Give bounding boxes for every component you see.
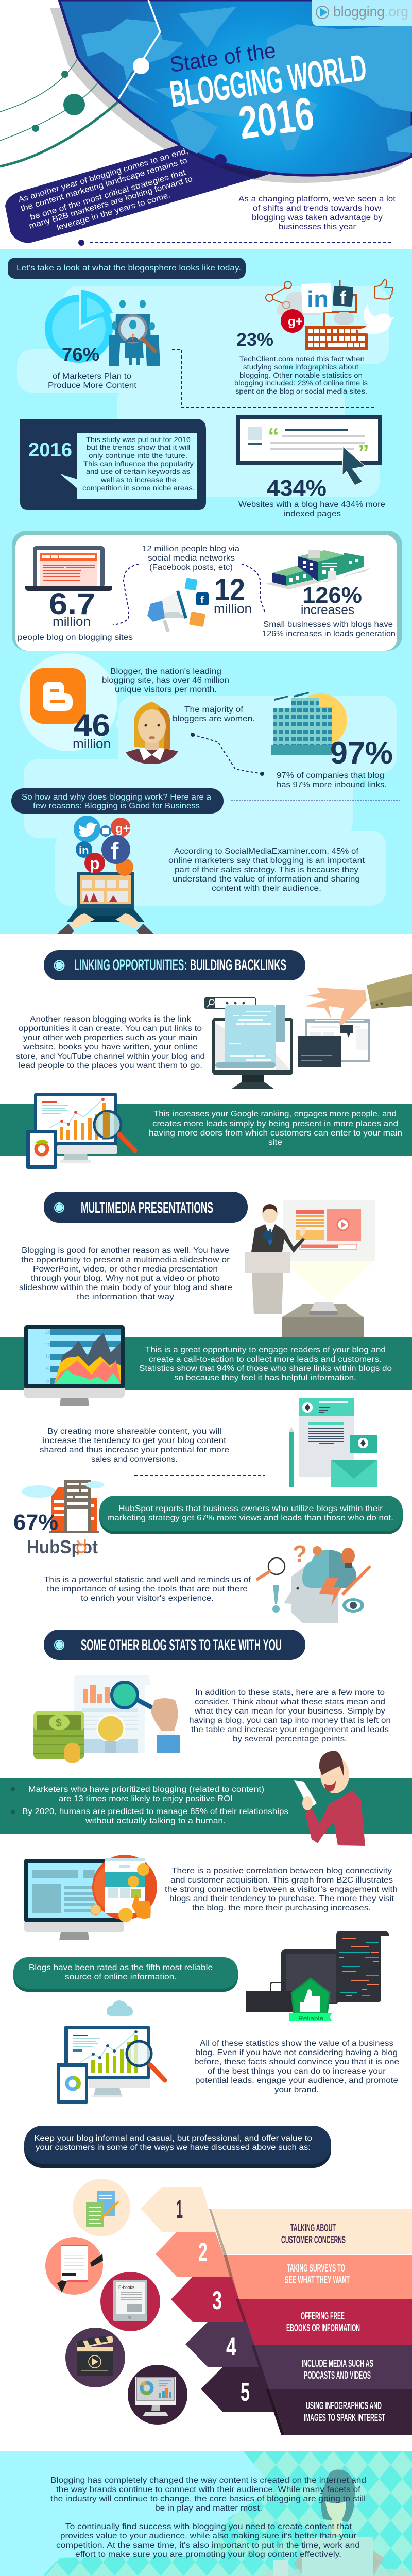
stat: 97%: 97% of companies that blog <box>277 771 384 780</box>
stat: 12 million: 12 <box>214 572 245 607</box>
callout: 2016 study: well as to increase the <box>100 476 176 484</box>
text: conclusion: To continually find success with blogging you need to create content that <box>65 2522 352 2531</box>
band: call to action: Statistics show that 94% of those who share links within blogs do <box>139 1364 392 1373</box>
callout: keep your blog informal: Keep your blog informal and casual, but professional, and offer value to <box>34 2134 312 2143</box>
icon: cloud analytics dashboard <box>57 2000 165 2104</box>
band: call to action: so because they feel it has helpful information. <box>174 1374 356 1382</box>
text: shareable content: increase the tendency to get your blog content <box>43 1436 227 1445</box>
stat: 12 million: (Facebook posts, etc) <box>149 563 233 572</box>
stat: 23%: studying some infographics about <box>243 363 358 371</box>
icon: head with ideas: ? <box>293 1540 307 1567</box>
text: multimedia: PowerPoint, video, or other media presentation <box>33 1265 218 1274</box>
intro text right: of shifts and trends towards how <box>253 204 382 213</box>
text: women bloggers: The majority of <box>184 705 244 714</box>
step 1: customer concerns: TALKING ABOUT <box>290 2223 336 2234</box>
callout: 2016 study <box>20 419 206 510</box>
stat: 434%: Websites with a blog have 434% more <box>238 500 385 509</box>
text: link opportunities: website, books you have written, your online <box>23 1043 198 1052</box>
stat: 12 million: social media networks <box>148 554 235 563</box>
callout: 2016 study: and use of certain keywords as <box>86 468 190 476</box>
icon: monitor, scroll, search bar and hand <box>204 974 412 1089</box>
callout: HubSpot report <box>99 1496 403 1534</box>
text: value of a business blog: before, these facts should convince you that it is one <box>194 2058 399 2066</box>
band: call to action <box>0 1325 412 1406</box>
intro ribbon: leverage in the years to come. <box>56 191 171 232</box>
heading: other blog stats <box>44 1630 305 1660</box>
heading: linking opportunities: LINKING OPPORTUNITIES: <box>74 957 187 974</box>
step 1: customer concerns: CUSTOMER CONCERNS <box>281 2234 346 2246</box>
stat: Blogger 46 million: Blogger, the nation's leading <box>110 667 221 676</box>
text: value of a business blog: potential leads, engage your audience, and promote <box>195 2076 398 2085</box>
text: social media examiner: part of their sales strategy. This is because they <box>175 866 358 874</box>
step 3: free ebooks: E-books <box>118 2285 134 2291</box>
stat: 434%: 434% <box>267 476 327 501</box>
text: shareable content <box>40 1427 229 1464</box>
icon: monitor with quote <box>236 415 382 485</box>
step 5: infographics <box>128 2365 412 2435</box>
heading: why blogging works <box>11 788 224 814</box>
icon: laptop <box>25 546 112 591</box>
text: women bloggers <box>173 705 255 723</box>
callout: 2016 study: This can influence the popularity <box>83 460 194 468</box>
stat: 6.7 million: million <box>53 615 91 629</box>
icon: 67% building: 67% <box>13 1510 58 1535</box>
icon: tablet with social bubbles and hands: g+ <box>115 822 130 836</box>
heading: why blogging works: So how and why does blogging work? Here are a <box>22 793 211 802</box>
text: multimedia: through your blog. Why not put a video or photo <box>31 1274 220 1283</box>
intro ribbon: As another year of blogging comes to an end, <box>17 146 189 205</box>
stat: 126%: increases <box>301 603 354 617</box>
step 2: surveys: SEE WHAT THEY WANT <box>285 2275 350 2286</box>
step 4: media <box>65 2322 412 2389</box>
text: value of a business blog: of the best things you can do to increase your <box>208 2067 386 2076</box>
icon: monitor with area chart: 40 <box>45 1330 50 1335</box>
band: marketer stats: Marketers who have prioritized blogging (related to content) <box>28 1785 264 1794</box>
text: conclusion: be in play and matter most. <box>155 2504 262 2513</box>
icon: social media keyboard <box>266 280 394 350</box>
text: multimedia: slideshow within the main body of your blog and share <box>19 1283 232 1292</box>
text: powerful statistic: This is a powerful statistic and well and reminds us of <box>44 1575 251 1584</box>
text: additional stats <box>189 1688 391 1743</box>
text: value of a business blog: blog. Even if you have not considering having a blog <box>196 2048 398 2057</box>
panel: blogosphere stats <box>0 249 412 934</box>
text: conclusion <box>50 2476 366 2559</box>
icon: report, money and bulb: $ <box>56 1717 62 1729</box>
text: conclusion: provides value to your audience, while also making sure it's better than your <box>60 2532 356 2540</box>
text: additional stats: In addition to these stats, here are a few more to <box>195 1688 385 1697</box>
step 5: infographics: 5 <box>241 2378 250 2406</box>
callout: keep your blog informal: your customers in some of the ways we have discussed above such as: <box>36 2143 311 2152</box>
intro ribbon <box>5 145 270 243</box>
icon: tablet with social bubbles and hands: in <box>79 844 89 857</box>
title: State of the <box>168 38 277 77</box>
band: marketer stats: By 2020, humans are predicted to manage 85% of their relationships <box>22 1807 288 1816</box>
stat: 76%: 76% <box>62 345 99 365</box>
callout: reliable source: Blogs have been rated as the fifth most reliable <box>29 1963 213 1972</box>
text: shareable content: By creating more shareable content, you will <box>47 1427 221 1436</box>
icon: business building <box>265 550 371 589</box>
icon: 67% building <box>13 1480 104 1535</box>
icon: woman blogger <box>126 702 178 764</box>
text: link opportunities: store, and YouTube channel within your blog and <box>16 1052 205 1061</box>
text: additional stats: the table and increase your engagement and leads <box>191 1725 389 1734</box>
stat: 76%: Produce More Content <box>48 381 137 390</box>
stat: 6.7 million: people blog on blogging sites <box>18 633 133 642</box>
callout: 2016 study: only continue into the future. <box>89 452 187 460</box>
stat: 23%: 23% <box>236 330 273 350</box>
icon: monitor with area chart: 20 <box>45 1342 50 1347</box>
text: customer acquisition: There is a positive correlation between blog connectivity <box>171 1867 392 1875</box>
icon: monitor with quote: ” <box>358 440 369 465</box>
text: shareable content: shared and thus increase your potential for more <box>40 1446 229 1454</box>
stat: 434%: indexed pages <box>284 510 341 518</box>
text: women bloggers: bloggers are women. <box>173 715 255 723</box>
text: link opportunities: Another reason blogging works is the link <box>30 1015 191 1024</box>
text: customer acquisition: the strong connection between a visitor's engagement with <box>165 1885 398 1894</box>
band: call to action: create a call-to-action to collect more leads and customers. <box>149 1355 382 1364</box>
stat: 12 million: million <box>214 602 252 616</box>
band: marketer stats: without actually talking to a human. <box>85 1817 226 1825</box>
text: powerful statistic: to enrich your visitor's experience. <box>81 1594 214 1603</box>
callout: HubSpot report: marketing strategy get 67% more views and leads than those who do not. <box>107 1514 393 1522</box>
band: google ranking: creates more leads simply by being present in more places and <box>152 1120 398 1128</box>
logo: HubSpot: HubSpot <box>27 1536 98 1557</box>
stat: 76% <box>48 345 137 390</box>
text: social media examiner: online marketers say that blogging is an important <box>168 856 365 865</box>
icon: presenter with projector <box>245 1200 375 1337</box>
step 3: free ebooks: 3 <box>212 2286 222 2315</box>
stat: 6.7 million: 6.7 <box>49 587 95 621</box>
stat: 23%: TechClient.com noted this fact when <box>239 355 365 363</box>
text: conclusion: effort to make sure you are promoting your blog content effectively. <box>75 2550 341 2559</box>
heading: multimedia presentations: MULTIMEDIA PRESENTATIONS <box>81 1199 213 1216</box>
stat: Blogger 46 million: unique visitors per month. <box>115 685 217 694</box>
stat: Blogger 46 million: blogging site, has over 46 million <box>102 676 229 685</box>
stat: 23%: blogging. Other notable statistics on <box>239 371 363 379</box>
icon: marketers under magnifier <box>109 300 160 366</box>
icon: monitor with area chart: 0 <box>46 1379 49 1384</box>
intro text right: businesses this year <box>279 223 356 231</box>
band: google ranking: having more doors from which customers can enter to your main <box>149 1129 402 1138</box>
stat: 12 million <box>142 545 252 616</box>
band: call to action: This is a great opportunity to engage readers of your blog and <box>145 1346 386 1354</box>
icon: reliable badge with laptop: Reliable <box>298 2015 323 2022</box>
orbit lines with dots <box>0 59 118 166</box>
callout: 2016 study: 2016 <box>28 439 72 461</box>
text: additional stats: by several percentage points. <box>233 1735 347 1743</box>
text: additional stats: consider. Think about what these stats mean and <box>195 1698 385 1706</box>
text: conclusion: the industry will continue to change, the core basics of blogging are going to still <box>50 2495 366 2503</box>
callout: 2016 study: but the trends show that it will <box>87 444 190 451</box>
icon: office tower <box>271 692 347 755</box>
stat: Blogger 46 million: million <box>73 737 111 751</box>
text: conclusion: the way brands continue to connect with their audience. While many facets of <box>56 2485 361 2494</box>
intro ribbon: be one of the most critical strategies that <box>29 168 187 222</box>
text: additional stats: having a blog, you can tap into money that is left on <box>189 1716 391 1725</box>
intro text right <box>238 195 396 231</box>
icon: Blogger logo <box>30 668 86 724</box>
text: value of a business blog: your brand. <box>274 2086 319 2094</box>
intro ribbon: many B2B marketers are looking forward to <box>28 175 194 231</box>
text: customer acquisition: the blog, the more their purchasing increases. <box>192 1904 371 1912</box>
illustration: person at laptop <box>265 2469 410 2576</box>
icon: pie chart <box>45 289 116 363</box>
stat: 12 million: 12 million people blog via <box>142 545 239 553</box>
step 3: free ebooks: OFFERING FREE <box>301 2311 345 2322</box>
icon: tablet with social bubbles and hands: p <box>90 854 100 873</box>
icon: social media keyboard: g+ <box>288 315 303 329</box>
globe with world map <box>59 0 412 175</box>
stat: 97%: has 97% more inbound links. <box>277 781 387 789</box>
text: powerful statistic <box>44 1575 251 1603</box>
icon: tablet with social bubbles and hands: f <box>111 838 119 865</box>
stat: 126% <box>262 583 396 638</box>
icon: megaphone: f <box>200 595 204 606</box>
icon: tablet with social bubbles and hands <box>57 816 154 934</box>
icon: head with ideas <box>258 1540 370 1623</box>
text: social media examiner: understand the value of information and sharing <box>173 875 360 884</box>
stat: 126%: Small businesses with blogs have <box>263 620 393 629</box>
band: marketer stats <box>0 1751 412 1846</box>
step 1: customer concerns <box>73 2179 412 2255</box>
stat: 97% <box>277 736 393 789</box>
text: multimedia <box>19 1246 232 1301</box>
heading: linking opportunities <box>44 950 305 980</box>
icon: social media keyboard: f <box>340 287 347 308</box>
text: shareable content: sales and conversions. <box>91 1455 178 1464</box>
text: social media examiner: According to SocialMediaExaminer.com, 45% of <box>174 847 359 856</box>
stat: Blogger 46 million: 46 <box>74 708 110 742</box>
band: google ranking <box>0 1093 412 1169</box>
step 3: free ebooks <box>100 2272 412 2345</box>
stat: Blogger 46 million <box>73 667 229 751</box>
stat: 23%: spent on the blog or social media sites. <box>235 387 367 395</box>
list: five ways to add value <box>45 2179 412 2435</box>
text: additional stats: what they can mean for your business. Simply by <box>194 1707 385 1716</box>
intro ribbon: the content marketing landscape remains to <box>20 156 188 213</box>
text: customer acquisition <box>165 1867 398 1912</box>
icon: stationery <box>289 1398 377 1487</box>
panel: white stats card <box>12 531 402 651</box>
step 2: surveys: TAKING SURVEYS TO <box>287 2263 345 2274</box>
icon: monitor with area chart: 10 <box>45 1354 50 1359</box>
text: link opportunities: your other web properties such as your main <box>23 1033 197 1042</box>
icon: report, money and bulb <box>33 1675 180 1763</box>
text: link opportunities <box>16 1015 205 1070</box>
icon: social media keyboard: in <box>307 286 329 312</box>
text: multimedia: the information that way <box>77 1293 174 1301</box>
heading: blogosphere <box>8 258 246 279</box>
intro text right: blogging was taken advantage by <box>252 213 383 222</box>
callout: HubSpot report: HubSpot reports that business owners who utilize blogs within their <box>118 1504 383 1513</box>
title <box>167 38 369 149</box>
step 2: surveys: 2 <box>198 2238 208 2266</box>
text: conclusion: competition. At the same time, it's also important to put in the time, work and <box>56 2541 360 2550</box>
text: value of a business blog: All of these statistics show the value of a business <box>200 2039 393 2048</box>
text: multimedia: the opportunity to present a multimedia slideshow or <box>21 1256 230 1264</box>
icon: man with phone <box>294 1751 365 1846</box>
text: social media examiner <box>168 847 365 893</box>
stat: 126%: 126% increases in leads generation <box>262 630 396 638</box>
band: google ranking: site <box>268 1138 282 1147</box>
stat: 97%: 97% <box>330 736 393 770</box>
stat: 76%: of Marketers Plan to <box>53 372 131 381</box>
stat: 434% <box>238 476 385 518</box>
band: marketer stats: are 13 times more likely to enjoy positive ROI <box>59 1794 233 1803</box>
heading: blogosphere: Let's take a look at what the blogosphere looks like today. <box>16 264 241 273</box>
panel: conclusion <box>0 2451 412 2576</box>
title: 2016 <box>236 88 317 149</box>
stat: 6.7 million <box>18 587 133 642</box>
text: multimedia: Blogging is good for another reason as well. You have <box>22 1246 229 1255</box>
icon: monitor with web page and coins <box>24 1855 157 1940</box>
text: powerful statistic: the importance of using the tools that are out there <box>47 1585 248 1594</box>
step 4: media: 4 <box>226 2332 236 2361</box>
band: google ranking: This increases your Google ranking, engages more people, and <box>153 1110 397 1118</box>
text: customer acquisition: blogs and their tendency to purchase. The more they visit <box>169 1894 394 1903</box>
icon: monitor with area chart <box>24 1325 125 1406</box>
icon: reliable badge with laptop <box>246 1931 389 2022</box>
callout: keep your blog informal <box>24 2126 331 2168</box>
stat: 23%: blogging included: 23% of online time is <box>234 379 368 387</box>
callout: 2016 study: This study was put out for 2016 <box>86 436 191 444</box>
heading: multimedia presentations <box>44 1192 248 1223</box>
step 1: customer concerns: 1 <box>176 2195 183 2224</box>
text: link opportunities: opportunities it can create. You can put links to <box>19 1024 202 1033</box>
heading: linking opportunities: BUILDING BACKLINKS <box>190 957 286 974</box>
stat: 126%: 126% <box>302 583 362 608</box>
callout: 2016 study: competition in some niche areas. <box>82 484 195 492</box>
icon: megaphone <box>147 578 209 632</box>
logo tab: blogging <box>333 4 385 20</box>
hero: globe header <box>0 0 412 246</box>
intro text right: As a changing platform, we've seen a lot <box>238 195 396 204</box>
text: conclusion: Blogging has completely changed the way content is created on the internet and <box>50 2476 366 2485</box>
text: value of a business blog <box>194 2039 399 2094</box>
step 2: surveys <box>45 2232 412 2299</box>
icon: monitor with area chart: 5 <box>46 1366 49 1371</box>
icon: monitor with quote: “ <box>268 423 279 449</box>
text: social media examiner: content with their audience. <box>212 884 321 893</box>
callout: reliable source: source of online information. <box>65 1973 177 1981</box>
logo tab: .org <box>385 4 408 20</box>
logo tab <box>312 0 412 26</box>
callout: reliable source <box>13 1957 238 1992</box>
stat: 23% <box>234 330 368 395</box>
text: customer acquisition: and customer acquisition. This graph from B2C illustrates <box>170 1876 393 1885</box>
text: link opportunities: lead people to the places you want them to go. <box>19 1061 202 1070</box>
heading: why blogging works: few reasons: Blogging is Good for Business <box>33 802 200 810</box>
icon: analytics dashboard <box>26 1093 135 1169</box>
